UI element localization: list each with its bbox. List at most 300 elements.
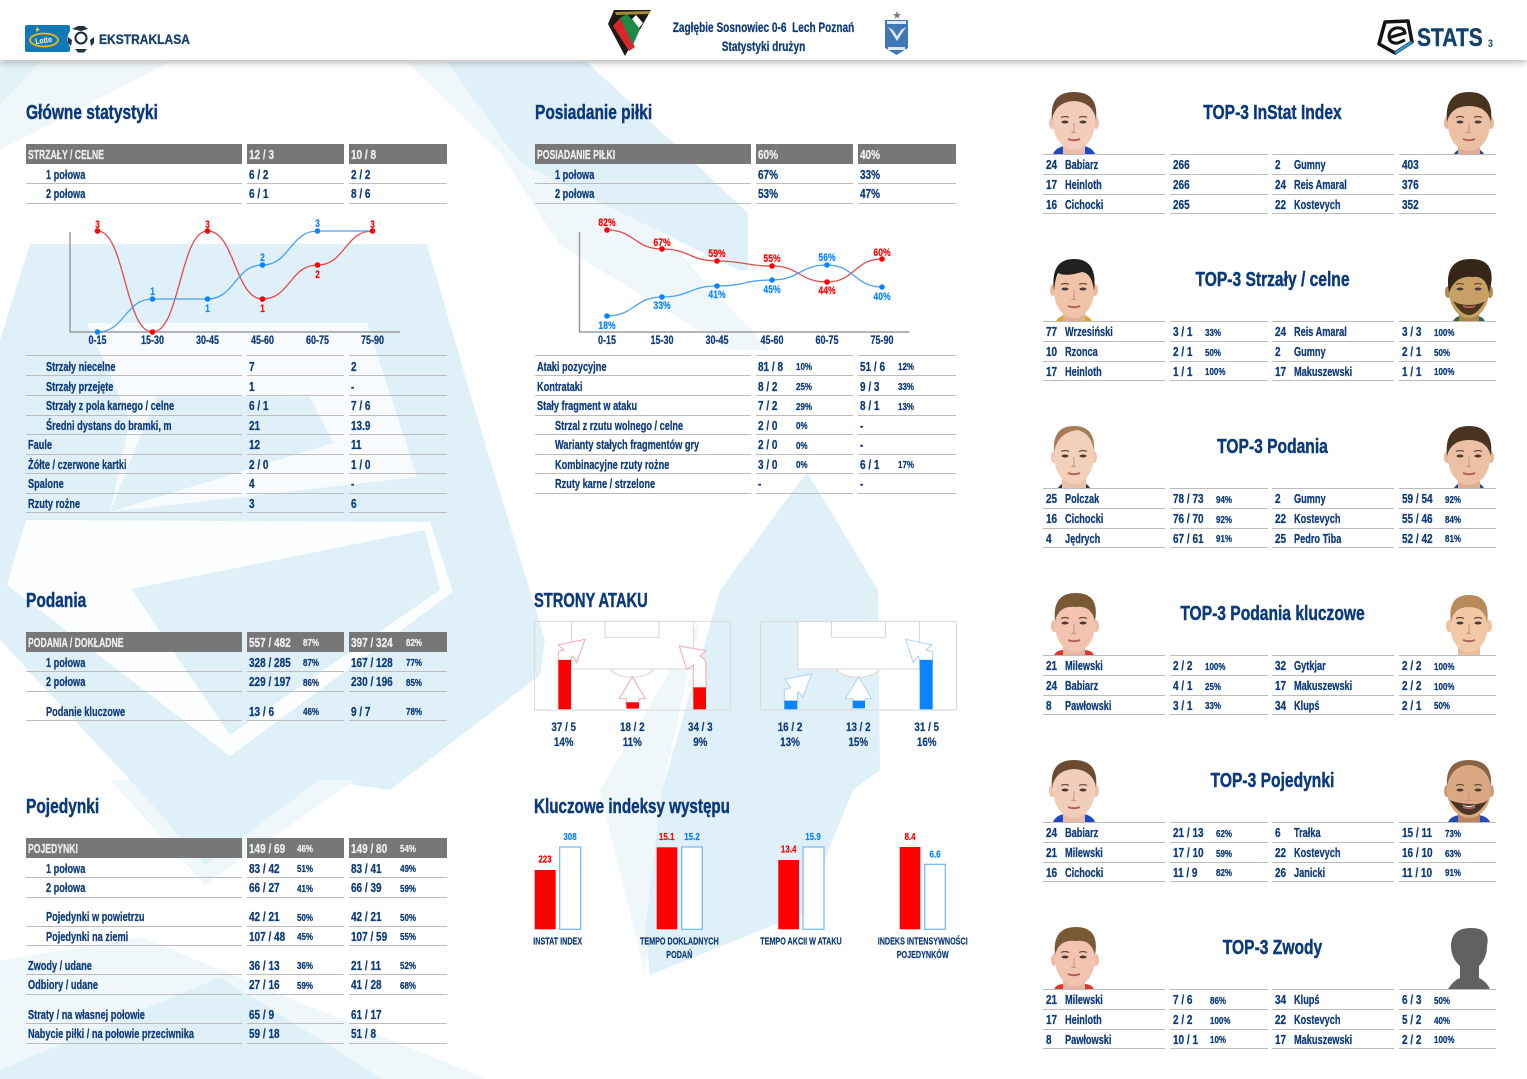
table: podania: 82% <box>406 638 422 648</box>
line chart: strzały celne: 30-45 <box>196 335 219 347</box>
line chart: posiadanie: 15-30 <box>650 335 673 347</box>
table: szczegóły strzałów i faule: 11 <box>351 438 362 452</box>
table: Strzały / celne: 50% <box>1205 348 1221 358</box>
panel: TOP-3 Strzały / celne <box>1043 259 1496 381</box>
table: szczegóły strzałów i faule: Średni dystans do bramki, m <box>46 418 172 432</box>
table: posiadanie: POSIADANIE PIŁKI <box>536 148 615 162</box>
table: InStat Index: 22 <box>1275 198 1286 212</box>
table: InStat Index: 24 <box>1275 178 1286 192</box>
table: Zwody: 100% <box>1434 1035 1454 1046</box>
table: strzały: 8 / 6 <box>351 187 370 201</box>
panel: TOP-3 Pojedynki <box>1043 760 1496 882</box>
table: podania: 230 / 196 <box>351 675 393 689</box>
table: Zwody: Milewski <box>1065 993 1103 1007</box>
table: szczegóły strzałów i faule: 7 <box>249 360 255 374</box>
line chart: posiadanie: 59% <box>708 248 725 260</box>
table: Strzały / celne: 10 <box>1046 345 1057 359</box>
table: Strzały / celne: 100% <box>1434 328 1454 338</box>
table: Podania: Kostevych <box>1294 512 1340 526</box>
table: Strzały / celne: Gumny <box>1294 345 1326 359</box>
table: Zwody: 17 <box>1275 1032 1286 1046</box>
panel: TOP-3 Zwody <box>1043 927 1496 1048</box>
table: Strzały / celne: Reis Amaral <box>1294 325 1347 339</box>
table: Podania kluczowe: 100% <box>1434 682 1454 692</box>
table: podania: 78% <box>406 707 422 718</box>
photo: Babiarz <box>1049 760 1099 822</box>
table: pojedynki: 59% <box>297 980 313 992</box>
table: pojedynki: 42 / 21 <box>351 910 382 924</box>
bar charts: indeksy: 8.4 <box>904 831 916 842</box>
table: Pojedynki: 21 <box>1046 846 1057 860</box>
table: Zwody: 34 <box>1275 993 1286 1007</box>
line chart: strzały celne: 45-60 <box>251 335 274 347</box>
table: Pojedynki: 21 / 13 <box>1173 826 1204 840</box>
photo: Polczak <box>1051 426 1097 488</box>
table: podania: Podanie kluczowe <box>46 704 125 718</box>
table: ataki: 17% <box>898 460 914 471</box>
table: ataki: 29% <box>796 402 812 412</box>
table: pojedynki <box>26 838 447 1044</box>
table: Strzały / celne <box>1043 321 1496 381</box>
table: pojedynki: POJEDYNKI <box>28 842 78 856</box>
table: InStat Index: 265 <box>1173 198 1190 212</box>
table: strzały <box>26 144 447 204</box>
table: pojedynki: Odbiory / udane <box>28 978 98 992</box>
diagram: strony ataku: 34 / 3 <box>688 721 713 734</box>
table: podania: 86% <box>303 678 319 688</box>
table: InStat Index <box>1043 154 1496 214</box>
diagram: strony ataku: 16 / 2 <box>778 721 802 734</box>
table: Podania kluczowe: 24 <box>1046 679 1057 693</box>
table: Strzały / celne: 1 / 1 <box>1173 364 1192 378</box>
table: szczegóły strzałów i faule: Żółte / czerwone kartki <box>28 458 127 472</box>
table: ataki: 81 / 8 <box>758 360 783 374</box>
table: pojedynki: 45% <box>297 932 313 943</box>
line chart: posiadanie: 60% <box>873 247 890 259</box>
table: Podania kluczowe: Pawłowski <box>1065 698 1111 712</box>
table: pojedynki: 149 / 80 <box>351 842 387 856</box>
table: Strzały / celne: Rzonca <box>1065 345 1098 359</box>
panel: TOP-3 InStat Index <box>1043 92 1496 214</box>
table: szczegóły strzałów i faule: Strzały z pola karnego / celne <box>46 399 174 413</box>
table: Podania: 59 / 54 <box>1402 492 1433 506</box>
photo: Milewski <box>1051 593 1099 655</box>
table: ataki: 2 / 0 <box>758 438 777 452</box>
table: ataki: 0% <box>796 421 807 432</box>
table: ataki: 12% <box>898 362 914 373</box>
table: Strzały / celne: 2 <box>1275 345 1281 359</box>
bar charts: indeksy: 15.1 <box>659 831 674 842</box>
table: Podania kluczowe: Babiarz <box>1065 679 1098 693</box>
table: strzały: STRZAŁY / CELNE <box>28 148 104 162</box>
table: ataki: Ataki pozycyjne <box>536 360 606 374</box>
table: ataki: Kombinacyjne rzuty rożne <box>554 458 669 472</box>
line chart: posiadanie: 60-75 <box>815 335 838 347</box>
table: Podania kluczowe: 2 / 2 <box>1173 659 1192 673</box>
line chart: posiadanie: 41% <box>708 289 725 301</box>
table: pojedynki: 59% <box>400 884 416 894</box>
table: podania: 87% <box>303 658 319 669</box>
table: Strzały / celne: 3 / 1 <box>1173 325 1192 339</box>
table: Podania: 81% <box>1445 534 1461 545</box>
line chart: posiadanie: 75-90 <box>870 335 893 347</box>
table: Pojedynki: 26 <box>1275 866 1286 880</box>
line chart: strzały celne: 1 <box>260 303 265 315</box>
panel: Podania <box>26 590 447 721</box>
table: Pojedynki: 63% <box>1445 848 1461 860</box>
table: Podania: 84% <box>1445 514 1461 526</box>
table: pojedynki: 66 / 39 <box>351 881 382 895</box>
table: InStat Index: 17 <box>1046 178 1057 192</box>
line chart: posiadanie: 67% <box>653 237 670 249</box>
heading: Główne statystyki <box>26 102 158 124</box>
table: szczegóły strzałów i faule: 7 / 6 <box>351 399 370 413</box>
table: ataki: 10% <box>796 362 812 373</box>
line chart: posiadanie: 33% <box>653 300 670 312</box>
table: podania: 9 / 7 <box>351 704 370 718</box>
table: Strzały / celne: 17 <box>1046 364 1057 378</box>
diagram: strony ataku: 14% <box>554 736 574 749</box>
table: Pojedynki: 11 / 9 <box>1173 866 1197 880</box>
table: Podania: 78 / 73 <box>1173 492 1204 506</box>
table: Strzały / celne: 100% <box>1205 367 1225 378</box>
bar charts: indeksy: TEMPO AKCII W ATAKU <box>760 935 842 947</box>
diagram: strony ataku: 31 / 5 <box>914 721 939 734</box>
table: ataki: 33% <box>898 382 914 393</box>
line chart: posiadanie: 45% <box>763 284 780 296</box>
line chart: strzały celne: 1 <box>150 286 155 298</box>
table: strzały: 10 / 8 <box>351 148 376 162</box>
table: Zwody: 21 <box>1046 993 1057 1007</box>
table: szczegóły strzałów i faule: Faule <box>28 438 52 452</box>
table: szczegóły strzałów i faule: 2 / 0 <box>249 458 268 472</box>
table: Strzały / celne: 24 <box>1275 325 1286 339</box>
table: szczegóły strzałów i faule: Spalone <box>28 477 64 491</box>
table: Podania: Pedro Tiba <box>1294 532 1341 546</box>
table: podania <box>26 632 447 721</box>
table: Podania kluczowe: Makuszewski <box>1294 679 1352 693</box>
table: Podania: 55 / 46 <box>1402 512 1433 526</box>
table: strzały: 6 / 2 <box>249 168 268 182</box>
line chart: posiadanie: 30-45 <box>705 335 728 347</box>
table: InStat Index: 376 <box>1402 178 1419 192</box>
table: pojedynki: Pojedynki w powietrzu <box>46 910 145 924</box>
table: szczegóły strzałów i faule: 12 <box>249 438 260 452</box>
heading: Posiadanie piłki <box>534 102 652 124</box>
table: szczegóły strzałów i faule: 1 / 0 <box>351 458 370 472</box>
table: ataki: 0% <box>796 440 807 452</box>
table: Pojedynki: Trałka <box>1294 826 1321 840</box>
table: Zwody: 6 / 3 <box>1402 993 1421 1007</box>
line chart: strzały celne: 75-90 <box>361 335 384 347</box>
table: Strzały / celne: Wrzesiński <box>1065 325 1113 339</box>
line chart: posiadanie: 55% <box>763 253 780 265</box>
table: ataki: 8 / 2 <box>758 380 777 394</box>
photo: Milewski <box>1049 927 1099 989</box>
table: podania: 46% <box>303 707 319 718</box>
table: Pojedynki: Cichocki <box>1065 866 1103 880</box>
table: pojedynki: 52% <box>400 961 416 972</box>
table: ataki: 0% <box>796 460 807 471</box>
table: pojedynki: 50% <box>400 912 416 924</box>
table: podania: 87% <box>303 638 319 648</box>
table: InStat Index: 24 <box>1046 158 1057 172</box>
table: Pojedynki: 16 / 10 <box>1402 846 1433 860</box>
logo: E-Stats: STATS <box>1417 23 1483 51</box>
table: podania: 13 / 6 <box>249 704 274 718</box>
table: pojedynki: 41 / 28 <box>351 978 382 992</box>
table: Podania kluczowe: 50% <box>1434 701 1450 712</box>
table: szczegóły strzałów i faule: Strzały przejęte <box>46 380 113 394</box>
table: podania: 328 / 285 <box>249 656 291 670</box>
table: podania: 77% <box>406 658 422 669</box>
diagram: strony ataku: 37 / 5 <box>551 721 576 734</box>
panel: Pojedynki <box>26 796 447 1044</box>
crest: Lech Poznań <box>885 11 908 55</box>
table: szczegóły strzałów i faule: 6 / 1 <box>249 399 268 413</box>
heading: TOP-3 Podania <box>1217 436 1327 458</box>
table: Podania: 25 <box>1046 492 1057 506</box>
table: Pojedynki: 59% <box>1216 848 1232 860</box>
diagram: strony ataku <box>534 620 957 749</box>
diagram: strony ataku: 9% <box>693 736 708 749</box>
bar charts: indeksy: TEMPO DOKLADNYCH <box>640 935 719 947</box>
panel: Główne statystyki <box>26 102 447 513</box>
panel: Kluczowe indeksy występu <box>533 796 968 960</box>
table: Podania: Cichocki <box>1065 512 1103 526</box>
bar charts: indeksy: POJEDYNKÓW <box>897 948 949 960</box>
table: InStat Index: 266 <box>1173 158 1190 172</box>
table: Strzały / celne: 50% <box>1434 348 1450 358</box>
table: podania: 229 / 197 <box>249 675 291 689</box>
match title <box>672 19 854 54</box>
table: Zwody: Heinloth <box>1065 1013 1102 1027</box>
table: Podania: 92% <box>1216 514 1232 526</box>
table: ataki: Kontrataki <box>536 380 582 394</box>
table: strzały: 2 połowa <box>46 187 85 201</box>
line chart: strzały celne <box>69 218 400 347</box>
table: pojedynki: 41% <box>297 884 313 894</box>
table: Pojedynki: 62% <box>1216 828 1232 840</box>
table: Zwody: 17 <box>1046 1013 1057 1027</box>
table: Strzały / celne: Makuszewski <box>1294 364 1352 378</box>
table: Strzały / celne: 77 <box>1046 325 1057 339</box>
table: Pojedynki: 24 <box>1046 826 1057 840</box>
table: pojedynki: 83 / 42 <box>249 862 280 876</box>
table: Podania: Gumny <box>1294 492 1326 506</box>
header bar <box>0 0 1527 60</box>
table: ataki: Stały fragment w ataku <box>536 399 637 413</box>
table: InStat Index: Kostevych <box>1294 198 1340 212</box>
table: InStat Index: Babiarz <box>1065 158 1098 172</box>
table: Podania: 52 / 42 <box>1402 532 1433 546</box>
table: InStat Index: 266 <box>1173 178 1190 192</box>
table: Podania kluczowe: 100% <box>1205 662 1225 672</box>
bar charts: indeksy: 308 <box>563 831 577 842</box>
table: ataki: 8 / 1 <box>860 399 879 413</box>
table: pojedynki: 2 połowa <box>46 881 85 895</box>
table: Podania: 25 <box>1275 532 1286 546</box>
line chart: strzały celne: 60-75 <box>306 335 329 347</box>
table: Strzały / celne: Heinloth <box>1065 364 1102 378</box>
diagram: strony ataku: 13% <box>780 736 800 749</box>
table: pojedynki: Straty / na własnej połowie <box>28 1008 145 1022</box>
table: Zwody: Klupś <box>1294 993 1320 1007</box>
table: pojedynki: 61 / 17 <box>351 1008 382 1022</box>
photo: silhouette <box>1444 927 1494 989</box>
table: pojedynki: 46% <box>297 844 313 854</box>
table: pojedynki: 68% <box>400 980 416 992</box>
table: pojedynki: 54% <box>400 844 416 854</box>
table: Podania kluczowe: 17 <box>1275 679 1286 693</box>
heading: TOP-3 Strzały / celne <box>1195 269 1349 291</box>
table: Zwody: 50% <box>1434 996 1450 1006</box>
table: posiadanie: 60% <box>758 148 778 162</box>
table: Podania: 92% <box>1445 494 1461 506</box>
table: Zwody: 22 <box>1275 1013 1286 1027</box>
table: podania: 167 / 128 <box>351 656 393 670</box>
table: ataki: 51 / 6 <box>860 360 885 374</box>
bar charts: indeksy: 15.2 <box>684 831 700 842</box>
match title: Zagłębie Sosnowiec 0-6 Lech Poznań <box>673 19 854 35</box>
heading: Kluczowe indeksy występu <box>534 796 730 818</box>
table: ataki: 9 / 3 <box>860 380 879 394</box>
table: podania: 85% <box>406 678 422 688</box>
table: Pojedynki <box>1043 822 1496 881</box>
panel: TOP-3 Podania <box>1043 426 1496 548</box>
table: podania: 557 / 482 <box>249 636 291 650</box>
diagram: strony ataku: 13 / 2 <box>846 721 871 734</box>
table: ataki: - <box>758 477 761 491</box>
photo: Gumny <box>1444 426 1494 488</box>
table: ataki: 2 / 0 <box>758 418 777 432</box>
table: InStat Index: Reis Amaral <box>1294 178 1347 192</box>
line chart: posiadanie: 56% <box>818 252 835 264</box>
bar charts: indeksy: 223 <box>538 854 552 865</box>
table: Zwody: Makuszewski <box>1294 1032 1352 1046</box>
table: Zwody: Kostevych <box>1294 1013 1340 1027</box>
table: szczegóły strzałów i faule: 4 <box>249 477 255 491</box>
table: Podania kluczowe: 2 / 2 <box>1402 659 1421 673</box>
table: pojedynki: 21 / 11 <box>351 958 381 972</box>
table: pojedynki: Zwody / udane <box>28 958 92 972</box>
table: pojedynki: 149 / 69 <box>249 842 285 856</box>
table: Podania kluczowe: 2 / 1 <box>1402 698 1421 712</box>
table: Podania: 91% <box>1216 534 1232 545</box>
bar charts: indeksy: 13.4 <box>781 844 796 855</box>
heading: TOP-3 Podania kluczowe <box>1180 603 1364 625</box>
table: posiadanie: 2 połowa <box>554 187 594 201</box>
table: pojedynki: 27 / 16 <box>249 978 280 992</box>
table: Podania: 22 <box>1275 512 1286 526</box>
table: strzały: 6 / 1 <box>249 187 268 201</box>
logo: Lotto Ekstraklasa <box>25 25 190 52</box>
line chart: strzały celne: 2 <box>260 252 265 264</box>
photo: Babiarz <box>1049 92 1099 154</box>
line chart: strzały celne: 0-15 <box>89 335 107 347</box>
table: Podania: 76 / 70 <box>1173 512 1204 526</box>
photo: Trałka <box>1444 760 1494 822</box>
table: Pojedynki: 6 <box>1275 826 1281 840</box>
line chart: strzały celne: 2 <box>315 269 320 281</box>
table: Zwody <box>1043 989 1496 1048</box>
table: Pojedynki: Milewski <box>1065 846 1103 860</box>
table: podania: 2 połowa <box>46 675 85 689</box>
bar charts: indeksy: INSTAT INDEX <box>533 935 582 947</box>
table: pojedynki: Nabycie piłki / na połowie przeciwnika <box>28 1027 194 1041</box>
table: Zwody: 5 / 2 <box>1402 1013 1421 1027</box>
table: ataki <box>535 355 956 494</box>
table: posiadanie: 47% <box>860 187 880 201</box>
bar charts: indeksy: INDEKS INTENSYWNOŚCI <box>878 934 968 947</box>
table: ataki: - <box>860 477 863 491</box>
table: szczegóły strzałów i faule <box>26 355 447 513</box>
table: Pojedynki: 17 / 10 <box>1173 846 1204 860</box>
table: Podania kluczowe: 21 <box>1046 659 1057 673</box>
table: Zwody: 86% <box>1210 996 1226 1006</box>
table: Podania kluczowe: 2 / 2 <box>1402 679 1421 693</box>
table: pojedynki: 36 / 13 <box>249 958 280 972</box>
table: ataki: Warianty stałych fragmentów gry <box>554 438 699 452</box>
table: Pojedynki: 22 <box>1275 846 1286 860</box>
table: pojedynki: 1 połowa <box>46 862 85 876</box>
bar charts: indeksy <box>533 831 968 960</box>
table: Strzały / celne: 2 / 1 <box>1402 345 1421 359</box>
panel: Posiadanie piłki <box>534 102 956 494</box>
table: InStat Index: 16 <box>1046 198 1057 212</box>
match title: Statystyki drużyn <box>722 38 805 54</box>
table: pojedynki: 66 / 27 <box>249 881 280 895</box>
table: ataki: 13% <box>898 402 914 412</box>
table: ataki: 3 / 0 <box>758 458 777 472</box>
table: Podania kluczowe <box>1043 655 1496 715</box>
table: strzały: 1 połowa <box>46 168 85 182</box>
line chart: posiadanie: 18% <box>598 320 615 332</box>
table: InStat Index: 352 <box>1402 198 1419 212</box>
table: Podania kluczowe: 34 <box>1275 698 1286 712</box>
table: posiadanie: 40% <box>860 148 880 162</box>
logo: Lotto Ekstraklasa: EKSTRAKLASA <box>99 31 190 47</box>
table: pojedynki: 36% <box>297 961 313 972</box>
table: Podania kluczowe: 33% <box>1205 701 1221 712</box>
table: Podania: Jędrych <box>1065 532 1100 546</box>
table: Zwody: 10 / 1 <box>1173 1032 1198 1046</box>
table: Strzały / celne: 100% <box>1434 367 1454 378</box>
crest: Zagłębie Sosnowiec <box>608 10 651 56</box>
diagram: strony ataku: 16% <box>917 736 937 749</box>
table: pojedynki: 50% <box>297 912 313 924</box>
table: Podania: 67 / 61 <box>1173 532 1204 546</box>
table: szczegóły strzałów i faule: - <box>351 380 354 394</box>
table: Strzały / celne: 2 / 1 <box>1173 345 1192 359</box>
table: posiadanie: 33% <box>860 168 880 182</box>
table: Strzały / celne: 1 / 1 <box>1402 364 1421 378</box>
line chart: strzały celne: 3 <box>315 218 320 230</box>
line chart: strzały celne: 1 <box>205 303 210 315</box>
diagram: strony ataku: 18 / 2 <box>620 721 645 734</box>
table: Pojedynki: 16 <box>1046 866 1057 880</box>
table: Podania kluczowe: Gytkjar <box>1294 659 1326 673</box>
table: strzały: 12 / 3 <box>249 148 274 162</box>
table: szczegóły strzałów i faule: - <box>351 477 354 491</box>
table: Podania kluczowe: Klupś <box>1294 698 1320 712</box>
table: pojedynki: 42 / 21 <box>249 910 280 924</box>
line chart: posiadanie: 45-60 <box>760 335 783 347</box>
line chart: posiadanie: 40% <box>873 291 890 303</box>
line chart: strzały celne: 3 <box>370 219 375 231</box>
table: ataki: 25% <box>796 382 812 393</box>
bar charts: indeksy: PODAŃ <box>666 949 692 960</box>
